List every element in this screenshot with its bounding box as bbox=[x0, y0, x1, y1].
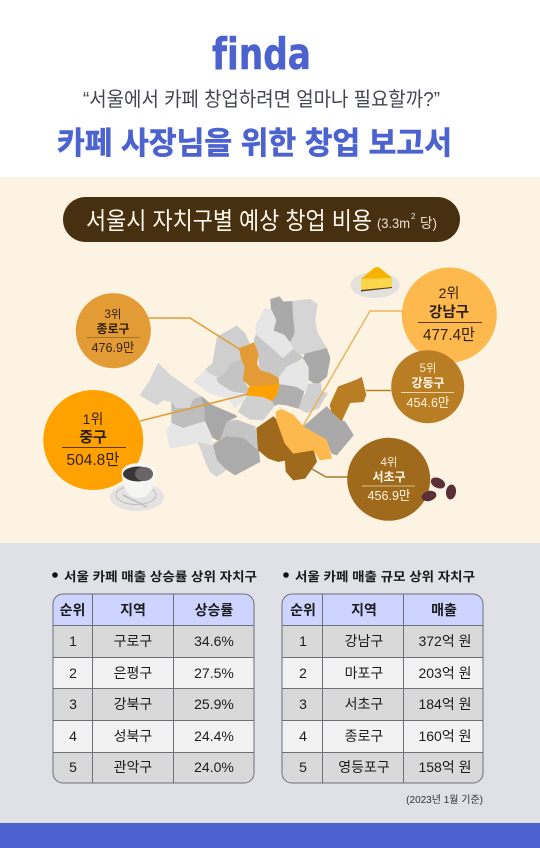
table: growth rate: 관악구 bbox=[114, 759, 152, 775]
table: growth rate: 34.6% bbox=[194, 633, 234, 649]
table: sales: 순위 bbox=[290, 602, 316, 618]
callout: 2nd Gangnam-gu: 2위 bbox=[439, 285, 459, 301]
table: growth rate: 강북구 bbox=[114, 696, 152, 712]
table: growth rate: 27.5% bbox=[194, 665, 234, 681]
table: growth rate: 24.4% bbox=[194, 728, 234, 744]
table: sales: 강남구 bbox=[345, 633, 383, 649]
table: sales: 1 bbox=[299, 633, 307, 649]
table: sales: 184억 원 bbox=[418, 696, 472, 712]
table: sales: 마포구 bbox=[345, 665, 383, 681]
leader lines bbox=[140, 311, 402, 477]
callout: 4th Seocho-gu: 4위 bbox=[381, 456, 397, 469]
callout: 2nd Gangnam-gu: 강남구 bbox=[429, 304, 469, 321]
table: sales: 3 bbox=[299, 696, 307, 712]
heading pill: cost by district: 2 bbox=[411, 212, 416, 221]
callout: 2nd Gangnam-gu: 477.4만 bbox=[423, 326, 475, 344]
table: sales: 5 bbox=[299, 759, 307, 775]
map: highlighted districts bbox=[239, 343, 366, 480]
table: growth rate: 1 bbox=[69, 633, 77, 649]
table: sales: 매출 bbox=[431, 602, 457, 618]
table: sales: 영등포구 bbox=[338, 759, 390, 775]
callout: 3rd Jongno-gu: 3위 bbox=[105, 308, 121, 321]
table: sales: 160억 원 bbox=[418, 728, 472, 744]
icon: coffee cup bbox=[110, 463, 164, 511]
table: sales: 서초구 bbox=[345, 696, 383, 712]
logo: finda: finda bbox=[212, 29, 311, 80]
heading pill: cost by district: (3.3m bbox=[377, 215, 410, 231]
map of Seoul districts bbox=[140, 297, 366, 480]
callout: 1st Jung-gu: 504.8만 bbox=[66, 451, 120, 469]
subtitle question: “서울에서 카페 창업하려면 얼마나 필요할까?” bbox=[83, 88, 440, 111]
table: growth rate: 순위 bbox=[60, 602, 85, 618]
table: sales: 4 bbox=[299, 728, 307, 744]
callout: 3rd Jongno-gu: 476.9만 bbox=[92, 340, 135, 355]
callout: 5th Gangdong-gu: 454.6만 bbox=[406, 395, 450, 410]
table: sales: 203억 원 bbox=[418, 665, 472, 681]
callout: 4th Seocho-gu: 서초구 bbox=[372, 470, 406, 484]
table: growth rate: 성북구 bbox=[114, 728, 152, 744]
table: growth rate: 25.9% bbox=[194, 696, 234, 712]
callout: 4th Seocho-gu: 456.9만 bbox=[368, 488, 411, 503]
table: sales: 종로구 bbox=[345, 728, 383, 744]
footnote: date basis: (2023년 1월 기준) bbox=[406, 794, 483, 806]
heading pill: cost by district: 서울시 자치구별 예상 창업 비용 bbox=[86, 208, 372, 235]
table: growth rate: 5 bbox=[69, 759, 77, 775]
table: sales: 372억 원 bbox=[418, 633, 472, 649]
icon: coffee beans bbox=[420, 475, 457, 503]
heading: sales table: 서울 카페 매출 규모 상위 자치구 bbox=[295, 569, 475, 584]
table: growth rate: 2 bbox=[69, 665, 77, 681]
panel: tables section background bbox=[0, 543, 540, 823]
table: growth rate: 지역 bbox=[120, 602, 146, 618]
callout: 1st Jung-gu: 중구 bbox=[79, 429, 107, 446]
table: sales: 158억 원 bbox=[418, 759, 472, 775]
callout: 2nd Gangnam-gu bbox=[402, 268, 497, 362]
callout: 5th Gangdong-gu bbox=[391, 350, 464, 423]
footer bar bbox=[0, 823, 540, 848]
callout: 5th Gangdong-gu: 5위 bbox=[420, 362, 436, 375]
callout: 1st Jung-gu bbox=[43, 390, 143, 490]
panel: map section background bbox=[0, 177, 540, 543]
table: growth rate: 3 bbox=[69, 696, 77, 712]
map: grey districts bbox=[140, 297, 353, 477]
callout: 5th Gangdong-gu: 강동구 bbox=[411, 376, 445, 390]
table: growth rate: 구로구 bbox=[114, 633, 152, 649]
table: growth rate: 상승률 bbox=[195, 602, 233, 618]
callout: 4th Seocho-gu bbox=[347, 438, 430, 521]
table: growth rate bbox=[53, 594, 254, 783]
heading: growth rate table: 서울 카페 매출 상승률 상위 자치구 bbox=[64, 569, 257, 584]
heading pill: cost by district: 당) bbox=[420, 215, 437, 231]
icon: cheesecake bbox=[350, 267, 400, 298]
callout: 1st Jung-gu: 1위 bbox=[83, 411, 103, 427]
table: growth rate: 4 bbox=[69, 728, 77, 744]
table: growth rate: 24.0% bbox=[194, 759, 234, 775]
table: sales bbox=[282, 594, 483, 783]
table: sales: 지역 bbox=[351, 602, 377, 618]
table: growth rate: 은평구 bbox=[114, 665, 152, 681]
callout: 3rd Jongno-gu bbox=[76, 293, 151, 368]
heading pill: cost by district bbox=[63, 197, 460, 242]
table: sales: 2 bbox=[299, 665, 307, 681]
main title: 카페 사장님을 위한 창업 보고서 bbox=[57, 126, 452, 161]
callout: 3rd Jongno-gu: 종로구 bbox=[96, 322, 130, 336]
